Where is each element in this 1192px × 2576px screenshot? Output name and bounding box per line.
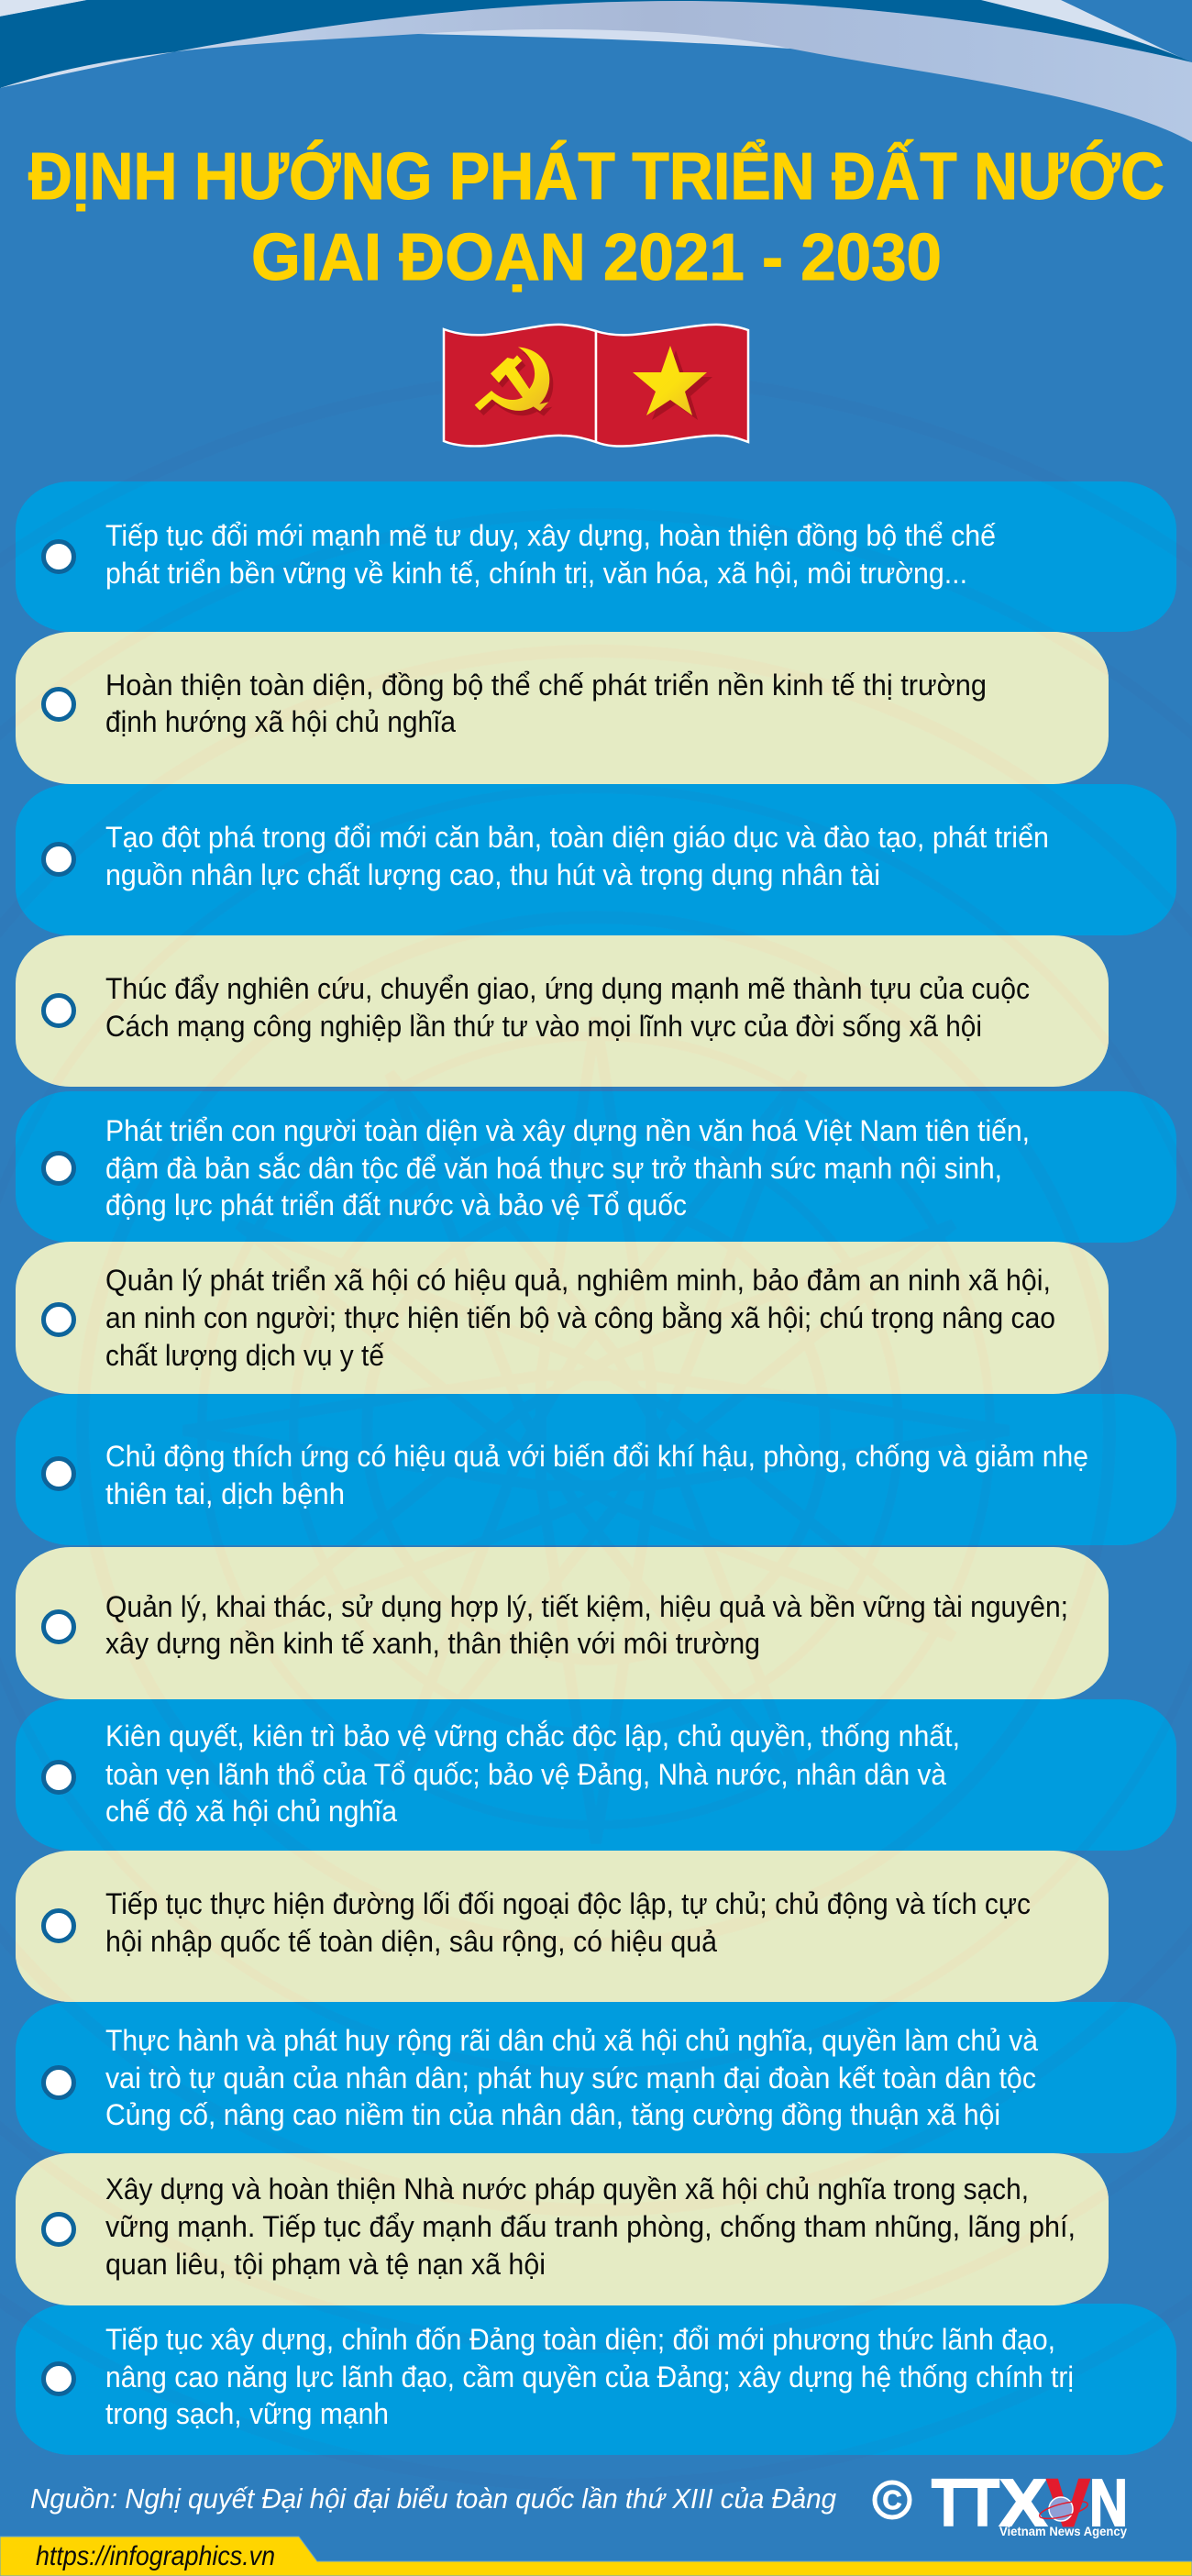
text: chất lượng dịch vụ y tế [105,1339,384,1372]
party flag [444,325,596,446]
panel 5 [16,1091,1176,1243]
text: Quản lý phát triển xã hội có hiệu quả, nghiêm minh, bảo đảm an ninh xã hội, [105,1264,1051,1297]
website url: https://infographics.vn [36,2541,275,2571]
panel 13 backdrop pill [16,2304,1176,2455]
text [105,1264,1055,1372]
text: phát triển bền vững về kinh tế, chính trị, văn hóa, xã hội, môi trường... [105,557,967,590]
text: động lực phát triển đất nước và bảo vệ Tổ quốc [105,1188,687,1222]
text: Tiếp tục xây dựng, chỉnh đốn Đảng toàn diện; đổi mới phương thức lãnh đạo, [105,2323,1055,2356]
panel 2 [16,632,1109,784]
text: trong sạch, vững mạnh [105,2397,389,2430]
source note: Nguồn: Nghị quyết Đại hội đại biểu toàn quốc lần thứ XIII của Đảng [30,2482,836,2515]
text [105,2172,1076,2281]
text: Thực hành và phát huy rộng rãi dân chủ xã hội chủ nghĩa, quyền làm chủ và [105,2024,1038,2057]
marker [44,1458,73,1489]
panel 3 [16,784,1176,935]
marker [44,1304,73,1335]
text: Tiếp tục thực hiện đường lối đối ngoại độc lập, tự chủ; chủ động và tích cực [105,1887,1031,1920]
TTXVN logo: TT [932,2467,999,2540]
panel 12 [16,2153,1109,2305]
text: Hoàn thiện toàn diện, đồng bộ thể chế phát triển nền kinh tế thị trường [105,669,987,702]
TTXVN logo [932,2467,1128,2540]
text: Tiếp tục đổi mới mạnh mẽ tư duy, xây dựng, hoàn thiện đồng bộ thể chế [105,519,996,552]
text: Quản lý, khai thác, sử dụng hợp lý, tiết kiệm, hiệu quả và bền vững tài nguyên; [105,1590,1068,1623]
marker [44,690,73,719]
title [28,139,1164,294]
text: chế độ xã hội chủ nghĩa [105,1795,397,1828]
text [105,519,996,590]
panel 7 [16,1394,1176,1545]
TTXVN logo: N [1089,2467,1128,2540]
text [105,821,1049,891]
text: Củng cố, nâng cao niềm tin của nhân dân, tăng cường đồng thuận xã hội [105,2098,1000,2131]
text [105,669,987,738]
marker [44,996,73,1025]
star flag [596,325,748,447]
text: nguồn nhân lực chất lượng cao, thu hút và trọng dụng nhân tài [105,858,880,891]
marker [44,2214,73,2245]
panel 10 [16,1851,1109,2002]
text: vai trò tự quản của nhân dân; phát huy sức mạnh đại đoàn kết toàn dân tộc [105,2062,1036,2095]
text: Thúc đẩy nghiên cứu, chuyển giao, ứng dụng mạnh mẽ thành tựu của cuộc [105,972,1030,1005]
globe [1038,2497,1089,2522]
marker [44,1911,73,1940]
panel 1 [16,481,1176,632]
text: toàn vẹn lãnh thổ của Tổ quốc; bảo vệ Đảng, Nhà nước, nhân dân và [105,1758,946,1791]
TTXVN logo: Vietnam News Agency [999,2525,1127,2538]
text: Tạo đột phá trong đổi mới căn bản, toàn diện giáo dục và đào tạo, phát triển [105,821,1049,854]
text [105,1719,960,1828]
panel 6 [16,1242,1109,1394]
text [105,2024,1038,2131]
text: quan liêu, tội phạm và tệ nạn xã hội [105,2248,546,2281]
text: an ninh con người; thực hiện tiến bộ và công bằng xã hội; chú trọng nâng cao [105,1301,1055,1334]
TTXVN logo: X [999,2467,1047,2540]
text: Kiên quyết, kiên trì bảo vệ vững chắc độc lập, chủ quyền, thống nhất, [105,1719,960,1752]
text: Xây dựng và hoàn thiện Nhà nước pháp quyền xã hội chủ nghĩa trong sạch, [105,2172,1029,2206]
marker [44,1612,73,1642]
marker [44,541,73,572]
panel 13 content [44,2323,1074,2430]
marker [44,844,73,875]
top swoosh decoration [0,0,1192,142]
text: đậm đà bản sắc dân tộc để văn hoá thực sự trở thành sức mạnh nội sinh, [105,1152,1002,1185]
text: thiên tai, dịch bệnh [105,1477,345,1510]
text [105,1114,1030,1222]
marker [44,1154,73,1183]
footer yellow bar [0,2537,1192,2576]
TTXVN logo: V [1047,2467,1089,2540]
text: hội nhập quốc tế toàn diện, sâu rộng, có hiệu quả [105,1925,717,1958]
title: GIAI ĐOẠN 2021 - 2030 [251,221,942,294]
copyright symbol [875,2482,910,2517]
text [105,1440,1088,1510]
copyright symbol: C [883,2486,902,2515]
panel 11 [16,2002,1176,2153]
text: Phát triển con người toàn diện và xây dựng nền văn hoá Việt Nam tiên tiến, [105,1114,1030,1147]
marker [44,2364,73,2394]
text [105,1590,1068,1660]
text: nâng cao năng lực lãnh đạo, cầm quyền của Đảng; xây dựng hệ thống chính trị [105,2360,1074,2394]
panel 9 [16,1699,1176,1851]
marker [44,2067,73,2098]
panel 8 [16,1547,1109,1699]
marker [44,1763,73,1792]
text: định hướng xã hội chủ nghĩa [105,705,456,738]
text: xây dựng nền kinh tế xanh, thân thiện với môi trường [105,1627,760,1660]
text [105,972,1030,1043]
text: Cách mạng công nghiệp lần thứ tư vào mọi lĩnh vực của đời sống xã hội [105,1010,982,1043]
text: Chủ động thích ứng có hiệu quả với biến đổi khí hậu, phòng, chống và giảm nhẹ [105,1440,1088,1473]
flags [444,325,748,447]
text [105,2323,1074,2430]
panel 4 [16,935,1109,1087]
text: vững mạnh. Tiếp tục đẩy mạnh đấu tranh phòng, chống tham nhũng, lãng phí, [105,2210,1076,2243]
text [105,1887,1031,1958]
